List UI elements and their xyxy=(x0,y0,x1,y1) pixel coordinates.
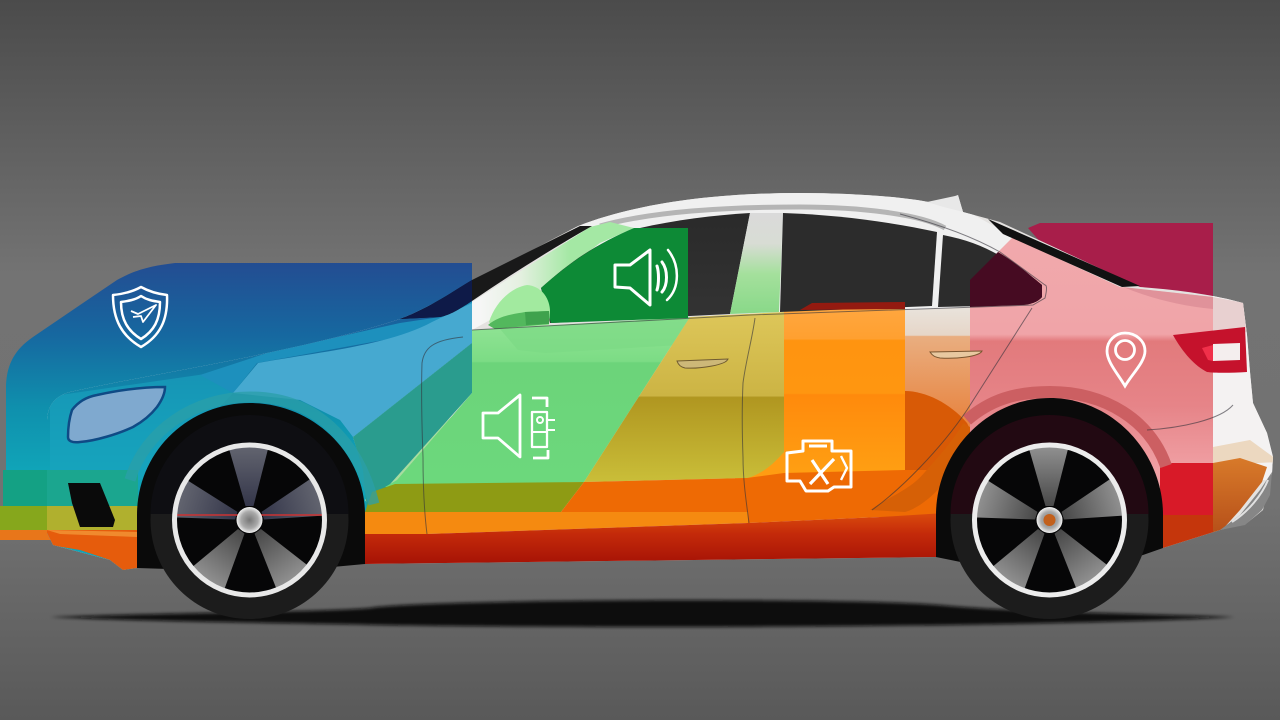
panel: pink rear zone xyxy=(970,238,1213,548)
icon: engine warning xyxy=(787,441,851,491)
rear arch trim xyxy=(967,392,1166,466)
panel: lower red sill xyxy=(365,514,936,564)
B-pillar xyxy=(730,213,783,314)
rear wheel xyxy=(950,415,1148,619)
front wheel xyxy=(150,415,348,619)
rear wheel arch xyxy=(936,398,1163,570)
panel: yellow overlap zone xyxy=(584,312,785,482)
front arch trim xyxy=(130,397,374,504)
front side window xyxy=(541,213,750,323)
quarter window xyxy=(938,235,1042,307)
icon: speaker with sound waves xyxy=(615,250,677,305)
headlight xyxy=(68,387,165,442)
ground shadow xyxy=(50,600,1235,627)
icon: shield xyxy=(113,287,167,347)
door handle: rear xyxy=(930,351,982,358)
roof and white pillars xyxy=(566,193,1012,314)
car body xyxy=(0,180,1280,580)
panel: orange zone xyxy=(365,307,990,534)
windscreen strip xyxy=(400,226,592,319)
front wheel arch xyxy=(137,403,365,570)
dark rear window strip xyxy=(988,219,1140,287)
rear diffuser xyxy=(1220,472,1272,530)
icon: speaker with device xyxy=(483,395,555,458)
white tail end of car xyxy=(1213,296,1273,532)
panel: blue/teal front of car xyxy=(47,301,472,570)
panel: crimson rear zone behind car xyxy=(1028,223,1213,310)
door mirror xyxy=(488,285,550,329)
front vent xyxy=(68,483,115,527)
door seams and handles xyxy=(422,214,1233,534)
tail light xyxy=(1173,327,1247,373)
icon: location pin xyxy=(1107,333,1145,386)
spoiler xyxy=(927,195,963,212)
panel: green door zone xyxy=(365,222,690,512)
panel: blue front zone behind car xyxy=(0,263,472,540)
door handle: front xyxy=(677,359,728,368)
rear side window xyxy=(780,213,937,312)
